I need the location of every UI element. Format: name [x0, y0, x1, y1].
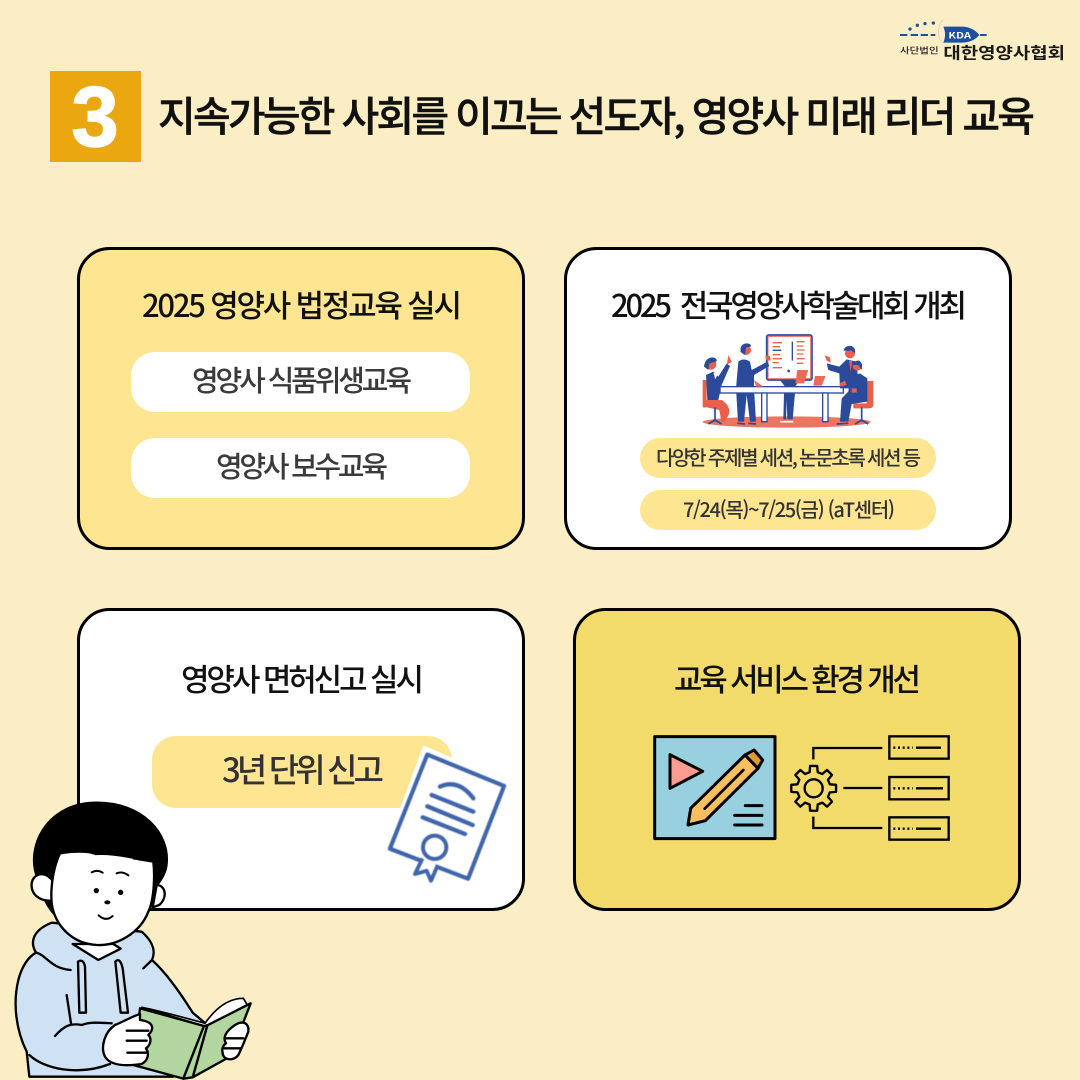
book cover: [133, 1003, 251, 1079]
right hand: [222, 1023, 248, 1059]
icon: gear connected to list items: [791, 736, 949, 840]
panel: education service improvement: [574, 610, 1020, 910]
face: [51, 849, 154, 945]
pill: food hygiene education: [131, 352, 470, 412]
pill: session types: [640, 438, 936, 478]
logo: Korean Dietetic Association: 대한영양사협회: [943, 41, 1065, 64]
logo: Korean Dietetic Association: [900, 19, 1065, 64]
right hand fingers: [224, 1038, 243, 1048]
icon: certificate: [383, 745, 512, 888]
hair: [33, 802, 168, 914]
character: boy reading a book: [16, 802, 251, 1079]
icon: video screen with pencil: [655, 737, 775, 839]
hoodie details: [29, 944, 152, 1070]
heading: legal education: 2025 영양사 법정교육 실시: [142, 281, 462, 326]
heading: service improvement: 교육 서비스 환경 개선: [674, 655, 921, 700]
logo: Korean Dietetic Association: 사단법인: [900, 44, 939, 56]
heading: license report: 영양사 면허신고 실시: [181, 655, 424, 700]
pill: three-year reporting: [152, 736, 452, 808]
left hand: [103, 1014, 152, 1065]
section number badge: [50, 70, 141, 165]
hoodie body: [16, 923, 213, 1077]
panel: legal education: [78, 248, 524, 548]
pill: date and venue: 7/24(목)~7/25(금) (aT센터): [683, 494, 895, 523]
pill: session types: 다양한 주제별 세션, 논문초록 세션 등: [656, 442, 921, 471]
title: 지속가능한 사회를 이끄는 선도자, 영양사 미래 리더 교육: [158, 83, 1035, 143]
panel: license report: [78, 610, 524, 910]
logo: Korean Dietetic Association: KDA: [948, 29, 972, 41]
pill: date and venue: [640, 490, 936, 530]
illustration: meeting around a table: [703, 335, 873, 428]
pill: continuing education: 영양사 보수교육: [216, 444, 388, 486]
pill: food hygiene education: 영양사 식품위생교육: [192, 358, 412, 400]
left hand fingers: [127, 1031, 148, 1053]
panel: national academic conference: [566, 248, 1010, 548]
pill: three-year reporting: 3년 단위 신고: [222, 744, 384, 792]
ears: [32, 874, 165, 907]
facial features: [92, 871, 128, 919]
pill: continuing education: [131, 438, 470, 498]
book pages: [142, 998, 248, 1027]
section number badge: 3: [71, 70, 119, 165]
heading: conference: 2025 전국영양사학술대회 개최: [611, 281, 967, 326]
